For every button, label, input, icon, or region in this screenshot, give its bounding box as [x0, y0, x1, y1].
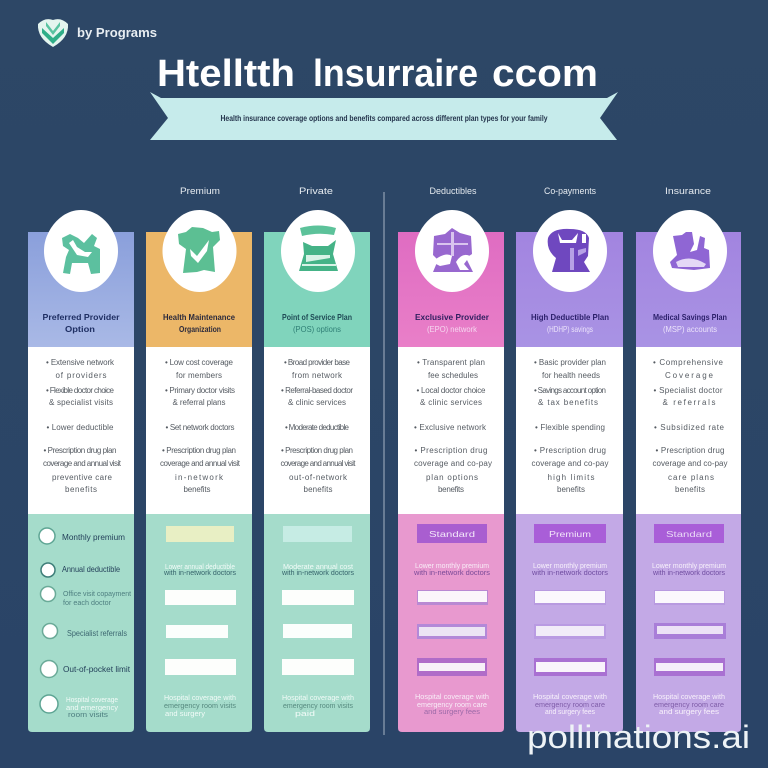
text block: care plans [668, 473, 714, 482]
value bars: with in-network doctors [163, 570, 236, 577]
heading [282, 312, 352, 334]
text block: • Prescription drug [414, 446, 488, 455]
text block: & specialist visits [49, 398, 113, 407]
text block: benefits [438, 485, 464, 494]
icon: plan 4 badge [415, 210, 489, 292]
panel: plan 6 [636, 210, 741, 732]
icon: plan 2 badge [162, 210, 236, 292]
value bars: Lower annual deductible [165, 564, 235, 571]
text block: plan options [426, 473, 478, 482]
heading [42, 312, 120, 334]
value bars: Hospital coverage with [282, 695, 354, 702]
value bars: Lower monthly premium [652, 563, 726, 570]
value bars: with in-network doctors [281, 570, 354, 577]
heading: (HDHP) savings [547, 324, 593, 334]
column labels: Private [299, 186, 333, 196]
value bars: Moderate annual cost [283, 564, 353, 571]
text block: • Moderate deductible [285, 423, 350, 432]
text block [280, 358, 356, 494]
text block: benefits [304, 485, 332, 494]
text block: • Prescription drug plan [162, 446, 236, 455]
heading: Medical Savings Plan [653, 312, 727, 322]
text block: • Savings account option [534, 386, 606, 395]
watermark: pollinations.ai [527, 719, 750, 755]
text block: • Prescription drug [656, 446, 724, 455]
value bars: Hospital coverage with [164, 695, 236, 702]
value bars: Premium [549, 530, 591, 539]
feature list: and emergency [66, 705, 119, 712]
text block: coverage and co-pay [532, 459, 608, 468]
value bars: emergency room care [417, 702, 487, 709]
column labels: Deductibles [430, 186, 477, 196]
value bars: emergency room care [535, 702, 605, 709]
text block: coverage and annual visit [43, 459, 122, 468]
column labels: Co-payments [544, 186, 596, 196]
text block: benefits [557, 485, 585, 494]
heading: Organization [179, 324, 221, 334]
feature list: Monthly premium [62, 533, 125, 542]
banner ribbon: Health insurance coverage options and benefits compared across different plan types for your family [220, 114, 548, 123]
text block: & tax benefits [538, 398, 598, 407]
icon: plan 5 badge [533, 210, 607, 292]
center divider [383, 192, 385, 735]
value bars: and surgery fees [545, 709, 595, 716]
text block: coverage and co-pay [652, 459, 728, 468]
text block: from network [292, 371, 343, 380]
heading [531, 312, 609, 334]
feature list [39, 528, 131, 719]
heading: (EPO) network [427, 324, 478, 334]
text block: & clinic services [288, 398, 346, 407]
text block [532, 358, 608, 494]
text block: • Set network doctors [166, 423, 234, 432]
text block: benefits [675, 485, 705, 494]
title [157, 53, 598, 95]
text block: fee schedules [428, 371, 478, 380]
feature list: room visits [68, 712, 109, 719]
text block: • Primary doctor visits [165, 386, 235, 395]
heading [415, 312, 490, 334]
text block: • Prescription drug plan [281, 446, 353, 455]
value bars [163, 526, 237, 718]
text block [43, 358, 122, 494]
value bars: emergency room visits [164, 703, 237, 710]
text block: & clinic services [420, 398, 482, 407]
value bars: and surgery [165, 711, 206, 718]
heading [163, 312, 235, 334]
text block: • Referral-based doctor [281, 386, 353, 395]
text block: coverage and co-pay [414, 459, 492, 468]
panel: plan 5 [516, 210, 623, 732]
text block: • Low cost coverage [165, 358, 234, 367]
heading: Preferred Provider [42, 312, 120, 322]
value bars: paid [295, 711, 315, 718]
text block: benefits [184, 485, 210, 494]
value bars [413, 524, 491, 716]
text block [160, 358, 241, 494]
heading: Health Maintenance [163, 312, 235, 322]
text block: • Transparent plan [417, 358, 485, 367]
text block: • Flexible doctor choice [46, 386, 115, 395]
heading: Point of Service Plan [282, 312, 352, 322]
title: lnsurraire [313, 53, 478, 95]
value bars: Hospital coverage with [653, 694, 725, 701]
text block: • Prescription drug [534, 446, 606, 455]
text block: • Broad provider base [284, 358, 351, 367]
icon: plan 1 badge [44, 210, 118, 292]
text block: & referral plans [172, 398, 226, 407]
panel: plan 2 [146, 210, 252, 732]
logo [38, 19, 157, 47]
value bars: Hospital coverage with [415, 694, 489, 701]
value bars: and surgery fees [659, 709, 720, 716]
heading: Option [65, 324, 95, 334]
feature list: for each doctor [63, 600, 112, 607]
text block: coverage and annual visit [160, 459, 241, 468]
feature list: Specialist referrals [67, 629, 127, 638]
text block: • Subsidized rate [654, 423, 725, 432]
heading: (POS) options [293, 324, 341, 334]
feature list: Out-of-pocket limit [63, 665, 131, 674]
feature list: Office visit copayment [63, 591, 131, 598]
column labels: Insurance [665, 186, 711, 196]
text block: coverage and annual visit [280, 459, 356, 468]
value bars: emergency room visits [283, 703, 353, 710]
text block: • Basic provider plan [534, 358, 606, 367]
value bars [281, 526, 354, 718]
heading: Exclusive Provider [415, 312, 490, 322]
column labels: Premium [180, 186, 220, 196]
title: Htelltth [157, 53, 295, 95]
text block [414, 358, 492, 494]
text block: • Lower deductible [46, 423, 114, 432]
text block: in-network [175, 473, 224, 482]
text block: • Exclusive network [414, 423, 487, 432]
panel: plan 1 [28, 210, 134, 732]
value bars: emergency room care [654, 702, 724, 709]
text block: • Flexible spending [535, 423, 605, 432]
text block: • Prescription drug plan [44, 446, 116, 455]
value bars: Hospital coverage with [533, 694, 607, 701]
value bars: Lower monthly premium [533, 563, 607, 570]
text block: for health needs [542, 371, 600, 380]
text block: • Comprehensive [653, 358, 724, 367]
text block: benefits [65, 485, 97, 494]
text block: • Local doctor choice [416, 386, 486, 395]
title: ccom [492, 53, 598, 95]
text block: high limits [548, 473, 594, 482]
text block [652, 358, 728, 494]
text block: out-of-network [289, 473, 348, 482]
heading: (MSP) accounts [663, 324, 717, 334]
panel: plan 4 [398, 210, 504, 732]
banner ribbon [150, 92, 618, 140]
value bars: with in-network doctors [652, 570, 725, 577]
value bars: Standard [429, 530, 475, 539]
icon: plan 6 badge [653, 210, 727, 292]
value bars: Lower monthly premium [415, 563, 489, 570]
icon: plan 3 badge [281, 210, 355, 292]
value bars: Standard [666, 530, 712, 539]
text block: of providers [56, 371, 106, 380]
value bars: with in-network doctors [531, 570, 609, 577]
text block: preventive care [52, 473, 113, 482]
value bars: and surgery fees [424, 709, 481, 716]
value bars: with in-network doctors [413, 570, 491, 577]
text block: for members [176, 371, 222, 380]
text block: Coverage [665, 371, 714, 380]
heading: High Deductible Plan [531, 312, 609, 322]
text block: & referrals [662, 398, 716, 407]
text block: • Specialist doctor [654, 386, 723, 395]
panel: plan 3 [264, 210, 370, 732]
feature list: Hospital coverage [66, 697, 118, 704]
text block: • Extensive network [46, 358, 115, 367]
logo: by Programs [77, 25, 157, 40]
value bars [652, 524, 726, 716]
value bars [531, 524, 609, 716]
heading [653, 312, 727, 334]
column labels [180, 186, 711, 196]
feature list: Annual deductible [62, 565, 120, 574]
